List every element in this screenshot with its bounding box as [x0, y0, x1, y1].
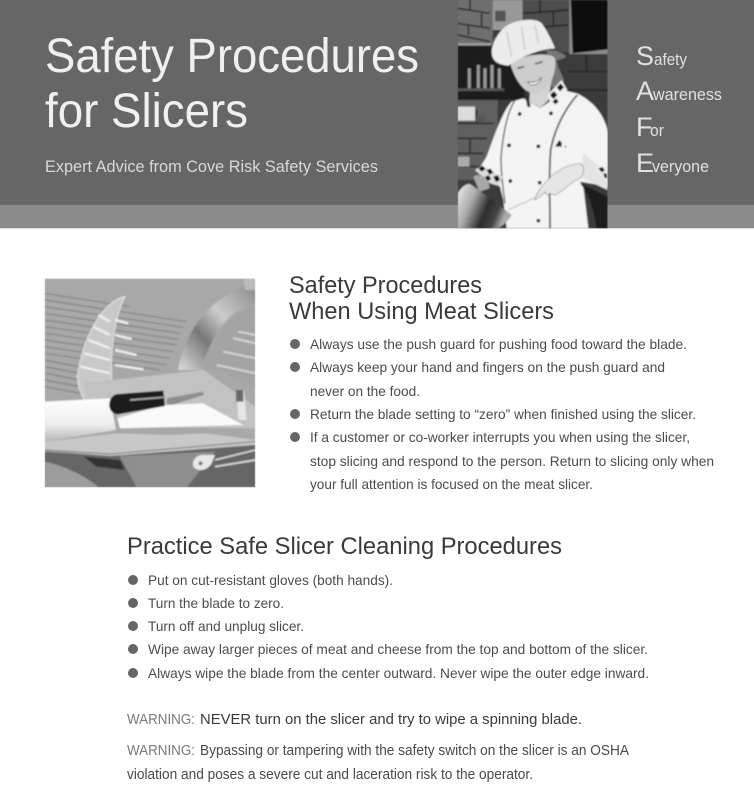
subtitle: Expert Advice from Cove Risk Safety Services — [45, 158, 378, 176]
bullet 2: never on the food. — [310, 384, 420, 399]
cleaning step 2: Turn the blade to zero. — [148, 596, 284, 611]
blade ring — [178, 285, 255, 370]
title: for Slicers — [45, 85, 248, 138]
awareness: wareness — [652, 85, 722, 104]
safety: S — [636, 41, 654, 71]
lower body — [45, 445, 255, 487]
cleaning step 5: Always wipe the blade from the center outward. Never wipe the outer edge inward. — [148, 666, 649, 681]
bullet 4: If a customer or co-worker interrupts you when using the slicer, — [310, 430, 690, 445]
section 2 bullet list — [128, 573, 649, 681]
hook — [193, 455, 215, 470]
photo: chef with pot — [458, 0, 608, 228]
everyone: veryone — [652, 157, 709, 176]
forearm and hand — [535, 163, 584, 200]
warning 1: NEVER turn on the slicer and try to wipe a spinning blade. — [200, 711, 582, 728]
push guard — [77, 297, 125, 402]
chef hat — [492, 20, 555, 66]
cuffs — [475, 166, 503, 186]
section 1 heading — [289, 272, 554, 325]
ridged tray — [45, 293, 187, 393]
bullet 2: Always keep your hand and fingers on the push guard and — [310, 360, 665, 375]
white bar — [45, 398, 116, 442]
bullet 4: stop slicing and respond to the person. Return to slicing only when — [310, 454, 714, 469]
for: or — [650, 121, 664, 140]
pot — [458, 184, 512, 228]
warning 2: WARNING: — [127, 743, 195, 759]
photo: meat slicer — [45, 278, 255, 487]
carriage arm — [110, 370, 255, 428]
cleaning step 4: Wipe away larger pieces of meat and cheese from the top and bottom of the slicer. — [148, 642, 648, 657]
jacket — [478, 91, 608, 228]
section 1 heading: Safety Procedures — [289, 272, 482, 299]
base plate — [45, 433, 255, 456]
section 2 heading: Practice Safe Slicer Cleaning Procedures — [127, 533, 562, 560]
hand on pot — [473, 175, 489, 192]
neck — [529, 80, 552, 108]
buttons — [518, 112, 521, 116]
header banner — [0, 0, 754, 229]
bullet 4 — [290, 430, 714, 492]
for: F — [636, 112, 652, 142]
for — [636, 112, 664, 142]
awareness: A — [636, 76, 654, 106]
everyone — [636, 148, 709, 178]
warning 2 — [127, 743, 629, 783]
everyone: E — [636, 148, 654, 178]
bullet 4: your full attention is focused on the meat slicer. — [310, 477, 593, 492]
bullet 3: Return the blade setting to “zero” when finished using the slicer. — [310, 407, 696, 422]
knob — [109, 391, 165, 414]
warning 2: Bypassing or tampering with the safety switch on the slicer is an OSHA — [200, 743, 629, 759]
title: Safety Procedures — [45, 30, 419, 83]
section 1 heading: When Using Meat Slicers — [289, 298, 554, 325]
safety: afety — [654, 50, 687, 69]
bullet 1: Always use the push guard for pushing food toward the blade. — [310, 337, 687, 352]
face — [511, 55, 555, 93]
safety — [636, 41, 687, 71]
warning 2: violation and poses a severe cut and laceration risk to the operator. — [127, 767, 533, 783]
cleaning step 3: Turn off and unplug slicer. — [148, 619, 304, 634]
title — [45, 30, 419, 138]
SAFE acronym — [636, 41, 722, 178]
warning 1: WARNING: — [127, 712, 195, 728]
section 1 bullet list — [290, 337, 714, 492]
awareness — [636, 76, 722, 106]
bullet 2 — [290, 360, 665, 399]
hair behind face — [547, 50, 566, 87]
collar checks — [547, 80, 567, 106]
cleaning step 1: Put on cut-resistant gloves (both hands). — [148, 573, 393, 588]
